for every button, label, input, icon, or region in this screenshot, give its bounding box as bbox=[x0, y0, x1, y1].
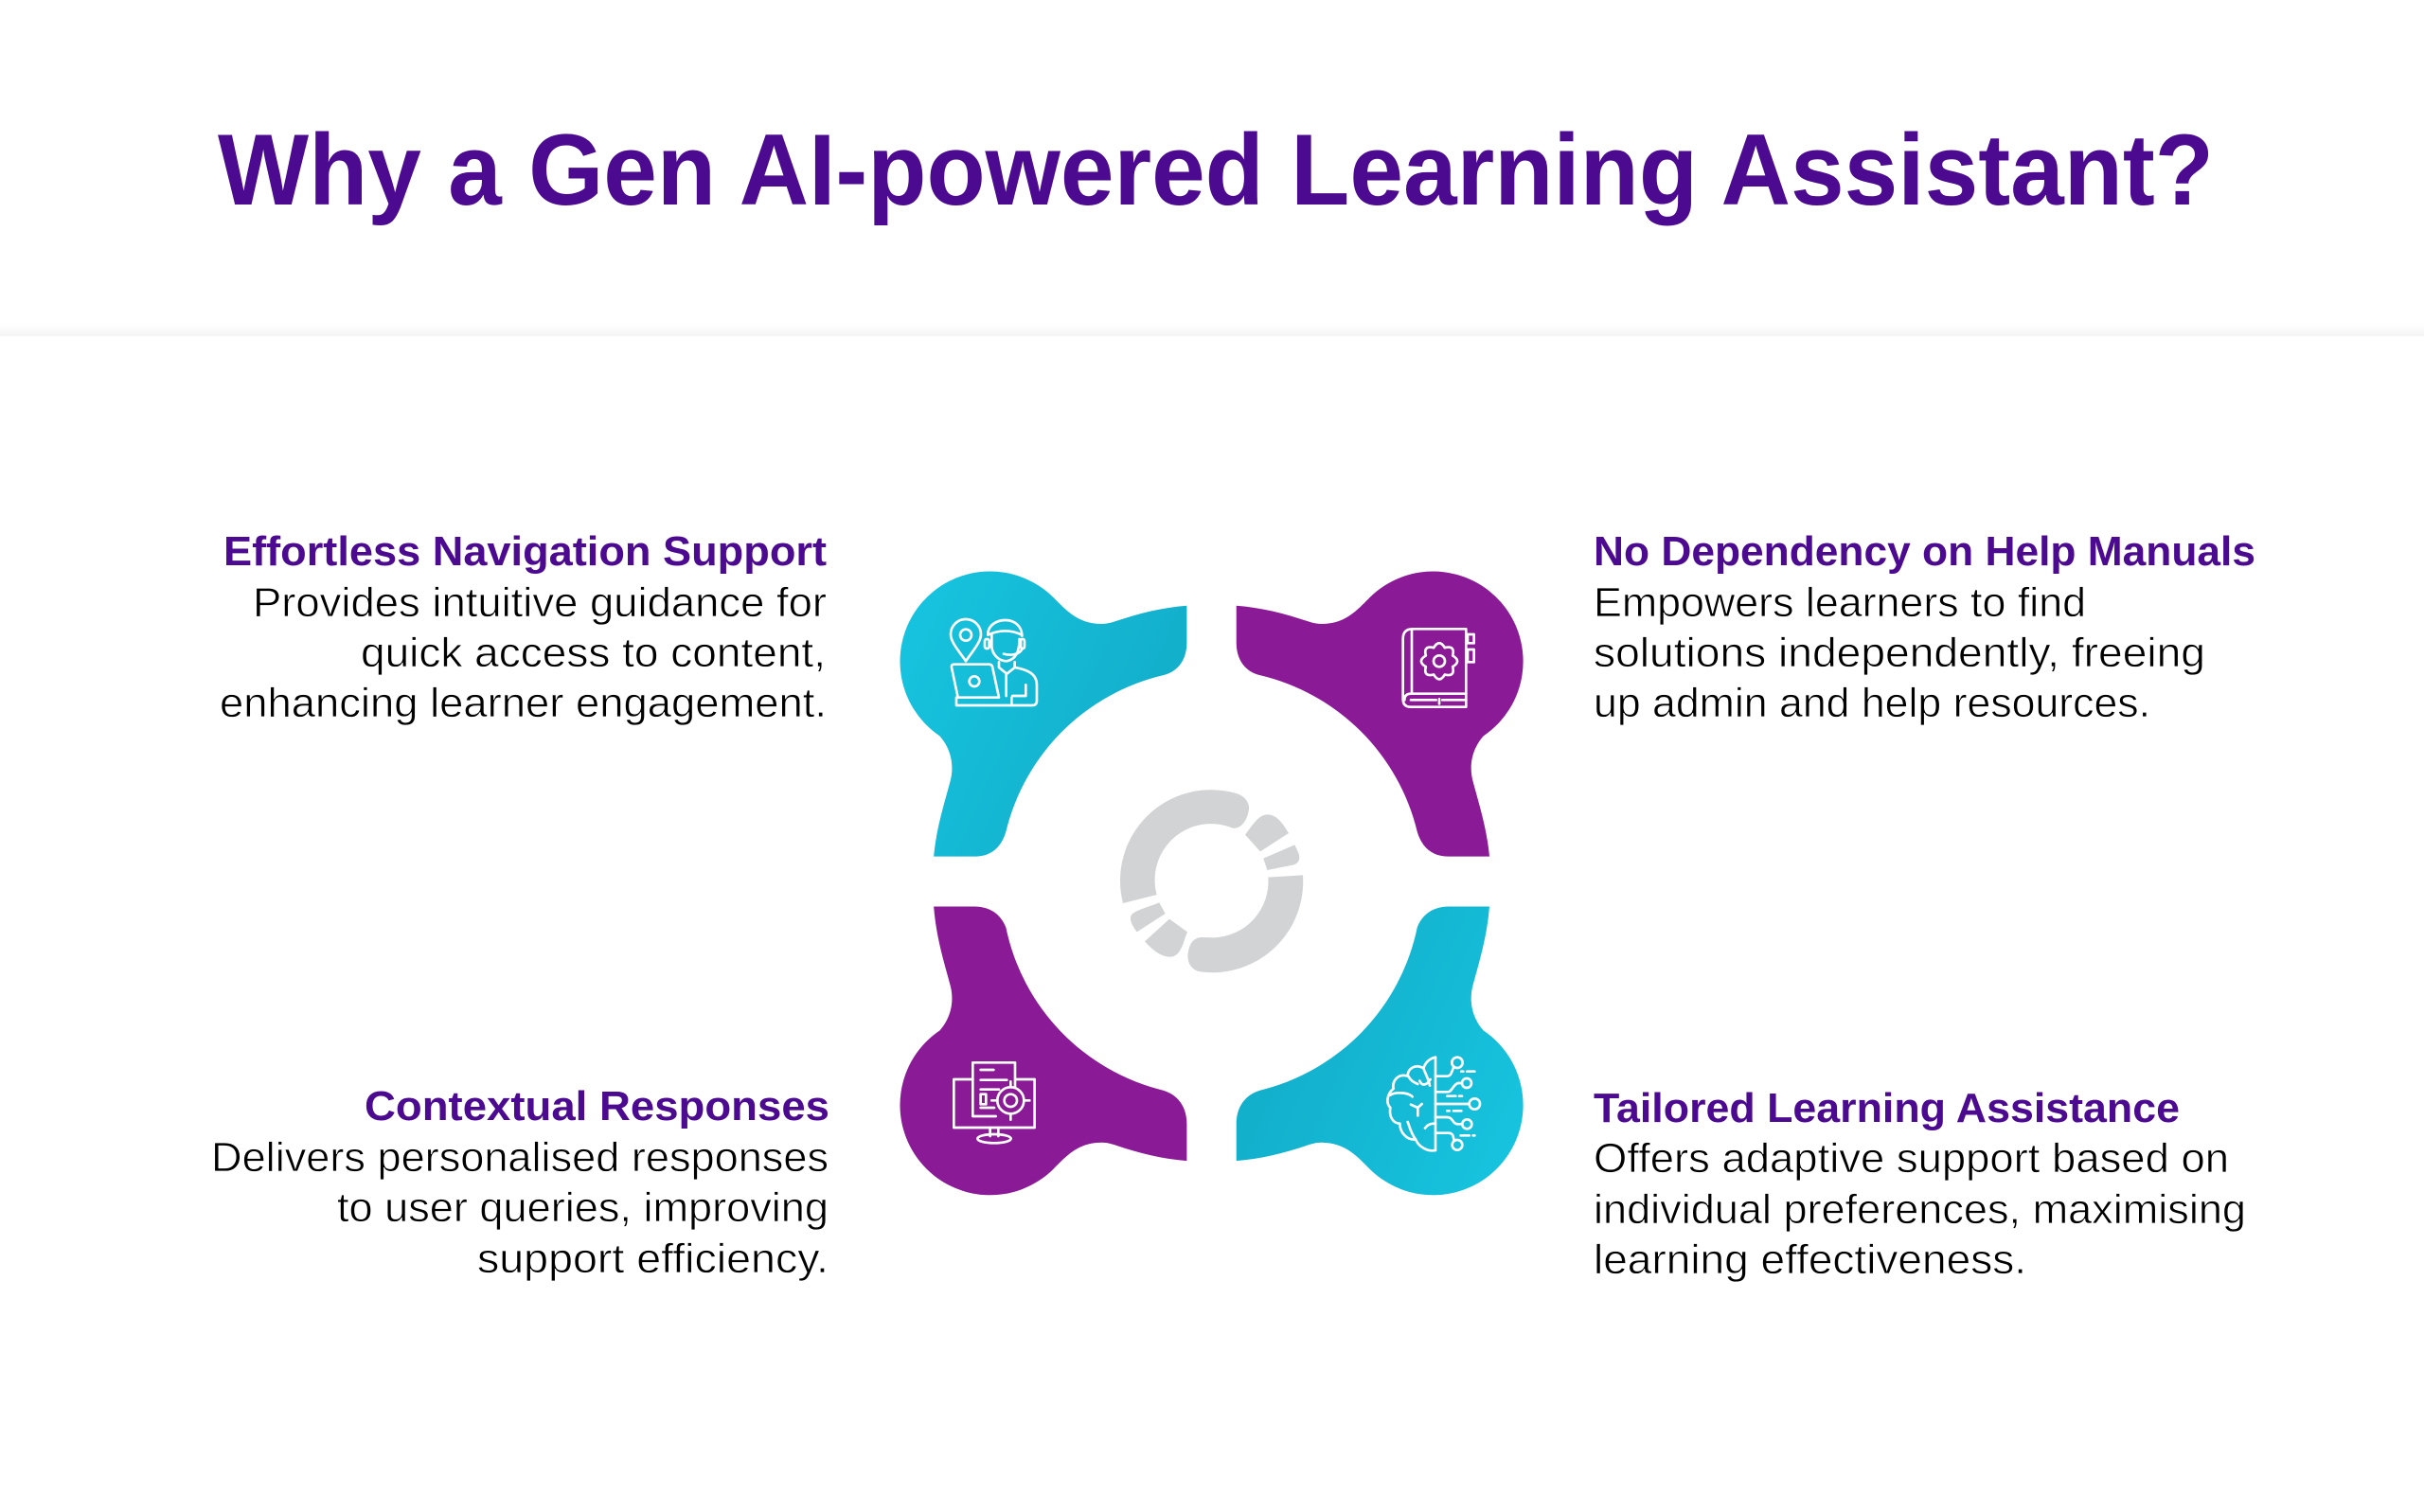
heading: tailored learning assistance: Tailored Learning Assistance bbox=[1594, 1085, 2180, 1131]
text block: contextual responses description: support efficiency. bbox=[477, 1236, 829, 1282]
text block: tailored learning description bbox=[1594, 1135, 2246, 1283]
blob: top left teal bbox=[900, 572, 1186, 857]
heading: contextual responses: Contextual Responses bbox=[365, 1083, 829, 1130]
panel: tailored learning assistance text bbox=[1594, 1085, 2246, 1283]
blob: top right purple bbox=[1237, 572, 1524, 857]
icon: brain with circuits bbox=[1387, 1058, 1480, 1150]
center icon: segmented grey ring bbox=[1120, 790, 1303, 972]
heading: no dependency on help manuals: No Dependency on Help Manuals bbox=[1594, 528, 2255, 575]
text block: help manuals description: up admin and help resources. bbox=[1594, 680, 2150, 726]
text block: effortless navigation description bbox=[220, 579, 827, 726]
text block: tailored learning description: individual preferences, maximising bbox=[1594, 1186, 2246, 1233]
panel: contextual responses text bbox=[211, 1083, 829, 1282]
text block: effortless navigation description: enhancing learner engagement. bbox=[220, 680, 827, 726]
blob: bottom right teal bbox=[1237, 906, 1524, 1195]
text block: contextual responses description bbox=[211, 1134, 829, 1282]
text block: contextual responses description: Delivers personalised responses bbox=[211, 1134, 829, 1181]
diagram: four blobs bbox=[900, 572, 1524, 1195]
text block: help manuals description bbox=[1594, 579, 2205, 726]
title: Why a Gen AI-powered Learning Assistant? bbox=[218, 113, 2214, 226]
icon: support agent with map pin and laptop bbox=[951, 619, 1037, 705]
panel: effortless navigation support text bbox=[220, 528, 827, 726]
icon: manual book with gear bbox=[1403, 629, 1474, 707]
text block: tailored learning description: learning effectiveness. bbox=[1594, 1236, 2026, 1283]
text block: tailored learning description: Offers adaptive support based on bbox=[1594, 1135, 2229, 1182]
header divider bbox=[0, 324, 2424, 336]
text block: help manuals description: solutions independently, freeing bbox=[1594, 630, 2205, 676]
text block: help manuals description: Empowers learners to find bbox=[1594, 579, 2086, 626]
panel: no dependency on help manuals text bbox=[1594, 528, 2255, 726]
blob: bottom left purple bbox=[900, 906, 1186, 1195]
heading: effortless navigation support: Effortless Navigation Support bbox=[223, 528, 827, 575]
text block: effortless navigation description: Provides intuitive guidance for bbox=[253, 579, 827, 626]
icon: monitor with document and target bbox=[954, 1062, 1035, 1143]
text block: effortless navigation description: quick access to content, bbox=[361, 630, 826, 676]
text block: contextual responses description: to user queries, improving bbox=[337, 1184, 829, 1231]
